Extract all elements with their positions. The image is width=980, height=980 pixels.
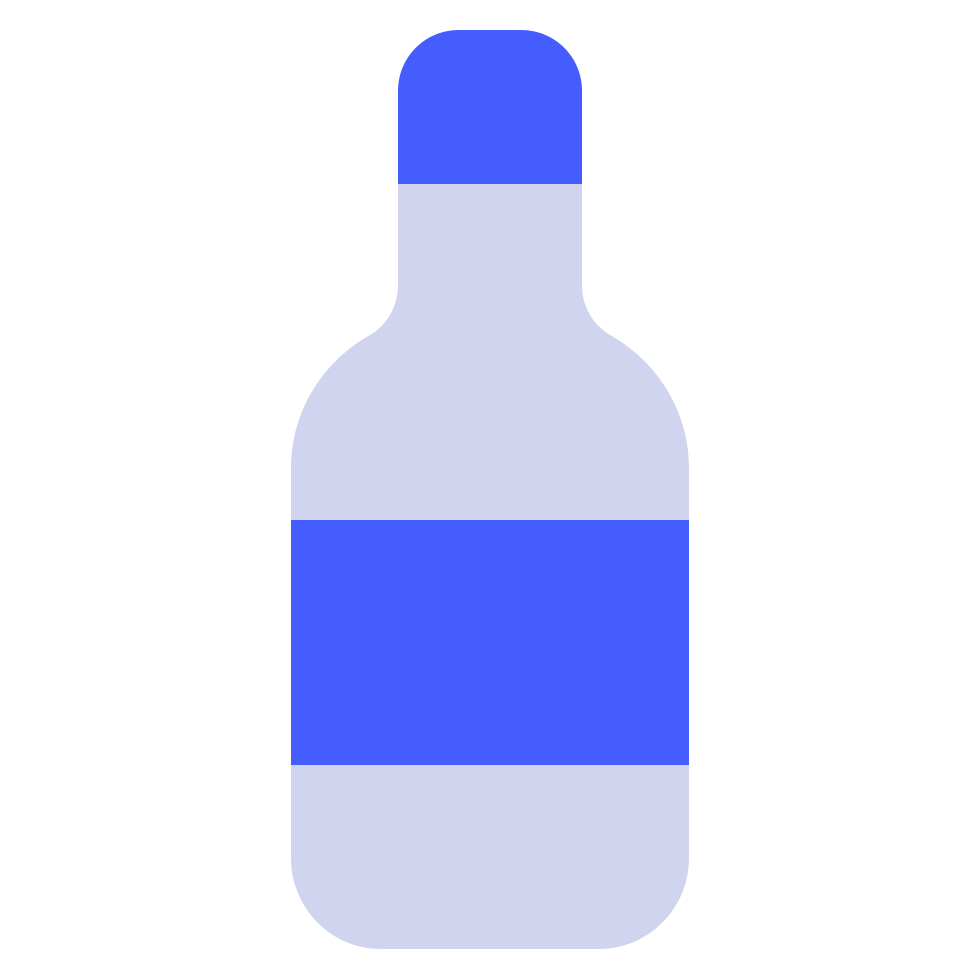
- icon: bottle: [291, 30, 689, 949]
- bottle label: [291, 520, 689, 765]
- bottle body: [291, 180, 689, 949]
- bottle cap: [398, 30, 582, 184]
